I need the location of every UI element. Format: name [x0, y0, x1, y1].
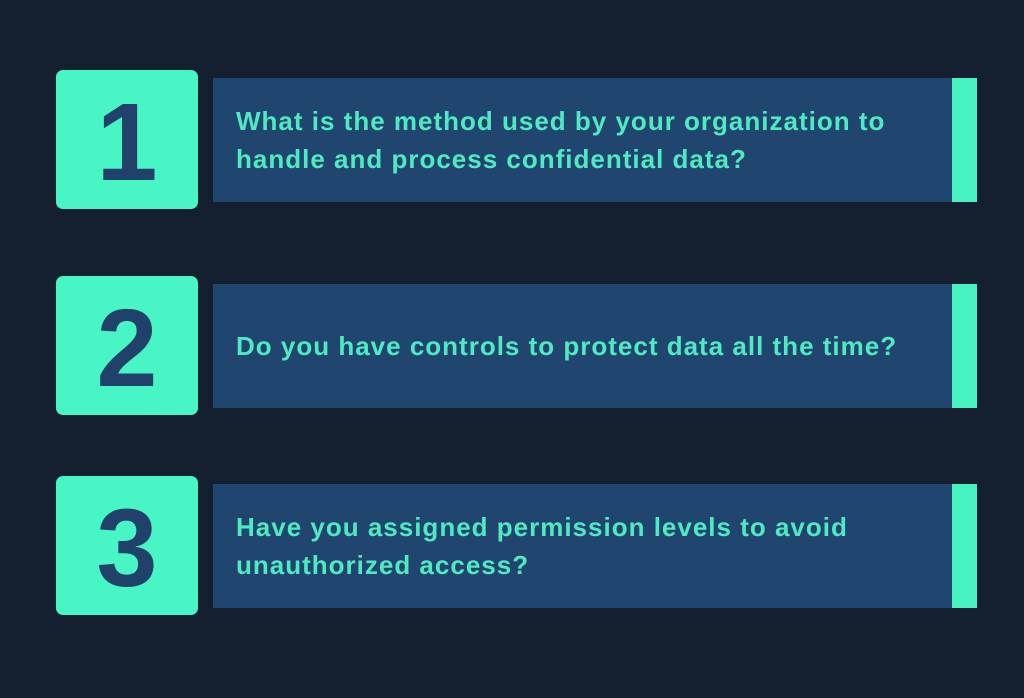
panel 3: Have you assigned permission levels to avoid unauthorized access?	[236, 512, 848, 580]
item 1	[56, 70, 977, 209]
item 3	[56, 476, 977, 615]
number box 3	[56, 476, 198, 615]
panel 1: What is the method used by your organization to handle and process confidential data?	[236, 106, 885, 174]
number box 1	[56, 70, 198, 209]
panel 1	[213, 78, 977, 202]
panel 2: Do you have controls to protect data all the time?	[236, 331, 897, 361]
number box 3: 3	[96, 487, 158, 610]
item 2	[56, 276, 977, 415]
number box 2	[56, 276, 198, 415]
number box 1: 1	[96, 81, 158, 204]
panel 2	[213, 284, 977, 408]
number box 2: 2	[96, 287, 158, 410]
panel 3	[213, 484, 977, 608]
